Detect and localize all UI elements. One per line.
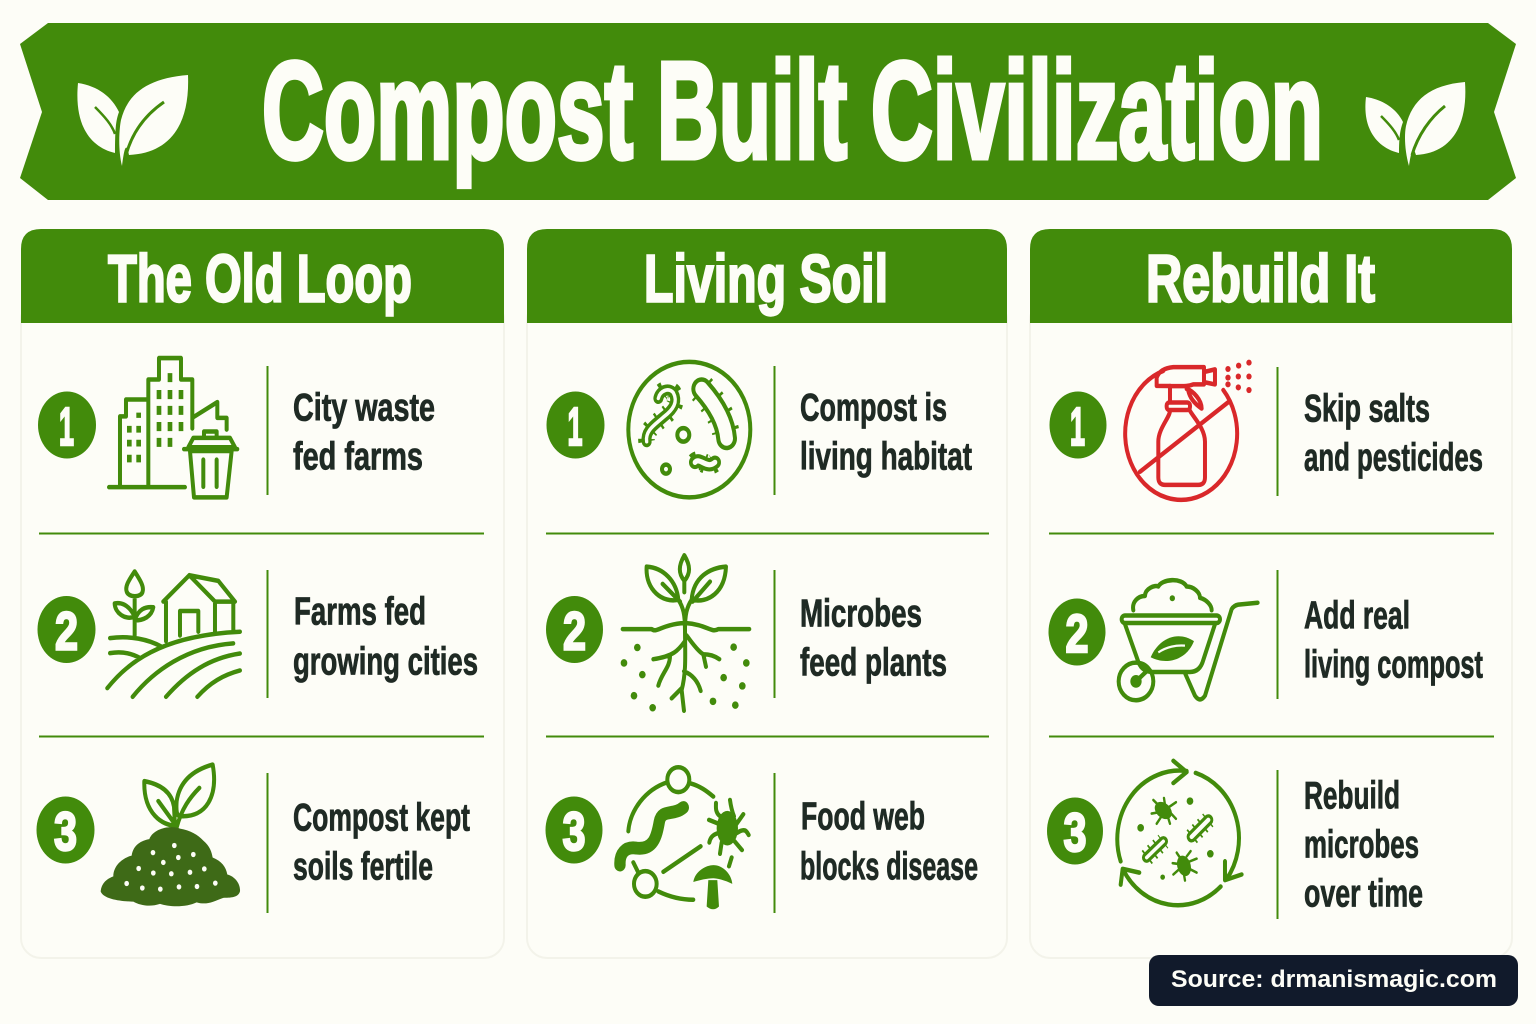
icon: plant roots in soil xyxy=(621,555,750,712)
number 2 xyxy=(546,596,603,663)
number 1 xyxy=(1050,392,1106,458)
text: compost is living habitat: living habitat xyxy=(800,436,972,478)
number 1: 1 xyxy=(59,397,74,457)
text: microbes feed plants xyxy=(800,592,947,684)
icon: no spray bottle xyxy=(1125,360,1252,500)
text: rebuild microbes over time: Rebuild xyxy=(1304,774,1400,818)
number 3 xyxy=(36,796,94,864)
number 3 xyxy=(546,796,602,864)
text: farms fed: growing cities xyxy=(293,640,478,684)
heading: Rebuild It: Rebuild It xyxy=(1146,242,1375,316)
text: add real living compost: Add real xyxy=(1304,594,1410,638)
icon: wheelbarrow of compost xyxy=(1119,580,1258,700)
heading: Living Soil: Living Soil xyxy=(644,242,888,316)
title banner xyxy=(20,23,1516,200)
text: rebuild microbes over time: microbes xyxy=(1304,824,1419,866)
source badge xyxy=(1149,955,1518,1006)
icon: compost pile with sprout xyxy=(101,765,240,906)
number 2: 2 xyxy=(55,602,78,662)
text: microbes feed plants: Microbes xyxy=(800,592,922,636)
number 3 xyxy=(1047,798,1103,864)
text: skip salts xyxy=(1304,388,1483,480)
icon: soil food web xyxy=(620,767,749,909)
number 2: 2 xyxy=(563,602,586,662)
text: compost kept: Compost kept xyxy=(293,796,470,840)
icon: microbe recovery cycle xyxy=(1117,761,1242,905)
text: rebuild microbes over time: over time xyxy=(1304,872,1423,916)
text: food web blocks disease: blocks disease xyxy=(800,846,978,888)
text: rebuild microbes over time xyxy=(1304,774,1423,916)
number 1 xyxy=(546,392,604,458)
text: food web blocks disease xyxy=(800,796,978,888)
number 3: 3 xyxy=(562,802,586,862)
text: skip salts: Skip salts xyxy=(1304,388,1430,430)
number 2: 2 xyxy=(1066,604,1088,664)
number 1: 1 xyxy=(1070,397,1085,457)
text: food web blocks disease: Food web xyxy=(801,796,925,838)
text: compost is living habitat xyxy=(800,386,972,478)
icon: microbes in circle xyxy=(628,362,750,497)
number 3: 3 xyxy=(1064,803,1086,863)
number 2 xyxy=(38,596,96,663)
text: compost is living habitat: Compost is xyxy=(800,386,947,430)
panel: The Old Loop xyxy=(21,229,504,958)
number 2 xyxy=(1048,598,1106,666)
number 1 xyxy=(38,392,96,458)
number 3: 3 xyxy=(54,802,77,862)
text: compost kept: soils fertile xyxy=(293,846,433,888)
panel: Living Soil xyxy=(527,229,1007,958)
icon: right leaves xyxy=(1365,82,1465,166)
text: microbes feed plants: feed plants xyxy=(800,642,947,684)
icon: farm xyxy=(107,571,240,697)
panel: Rebuild It xyxy=(1030,229,1512,958)
number 1: 1 xyxy=(568,397,582,457)
text: add real living compost xyxy=(1304,594,1483,686)
icon: city and trash can xyxy=(109,358,237,497)
text: farms fed xyxy=(293,590,478,684)
text: compost kept xyxy=(293,796,470,888)
text: city waste xyxy=(293,386,435,478)
text: city waste: City waste xyxy=(293,386,435,430)
source badge: Source: drmanismagic.com xyxy=(1171,966,1497,993)
text: city waste: fed farms xyxy=(293,436,423,478)
text: farms fed: Farms fed xyxy=(294,590,426,634)
heading: The Old Loop: The Old Loop xyxy=(108,242,412,316)
icon: left leaves xyxy=(77,75,188,166)
